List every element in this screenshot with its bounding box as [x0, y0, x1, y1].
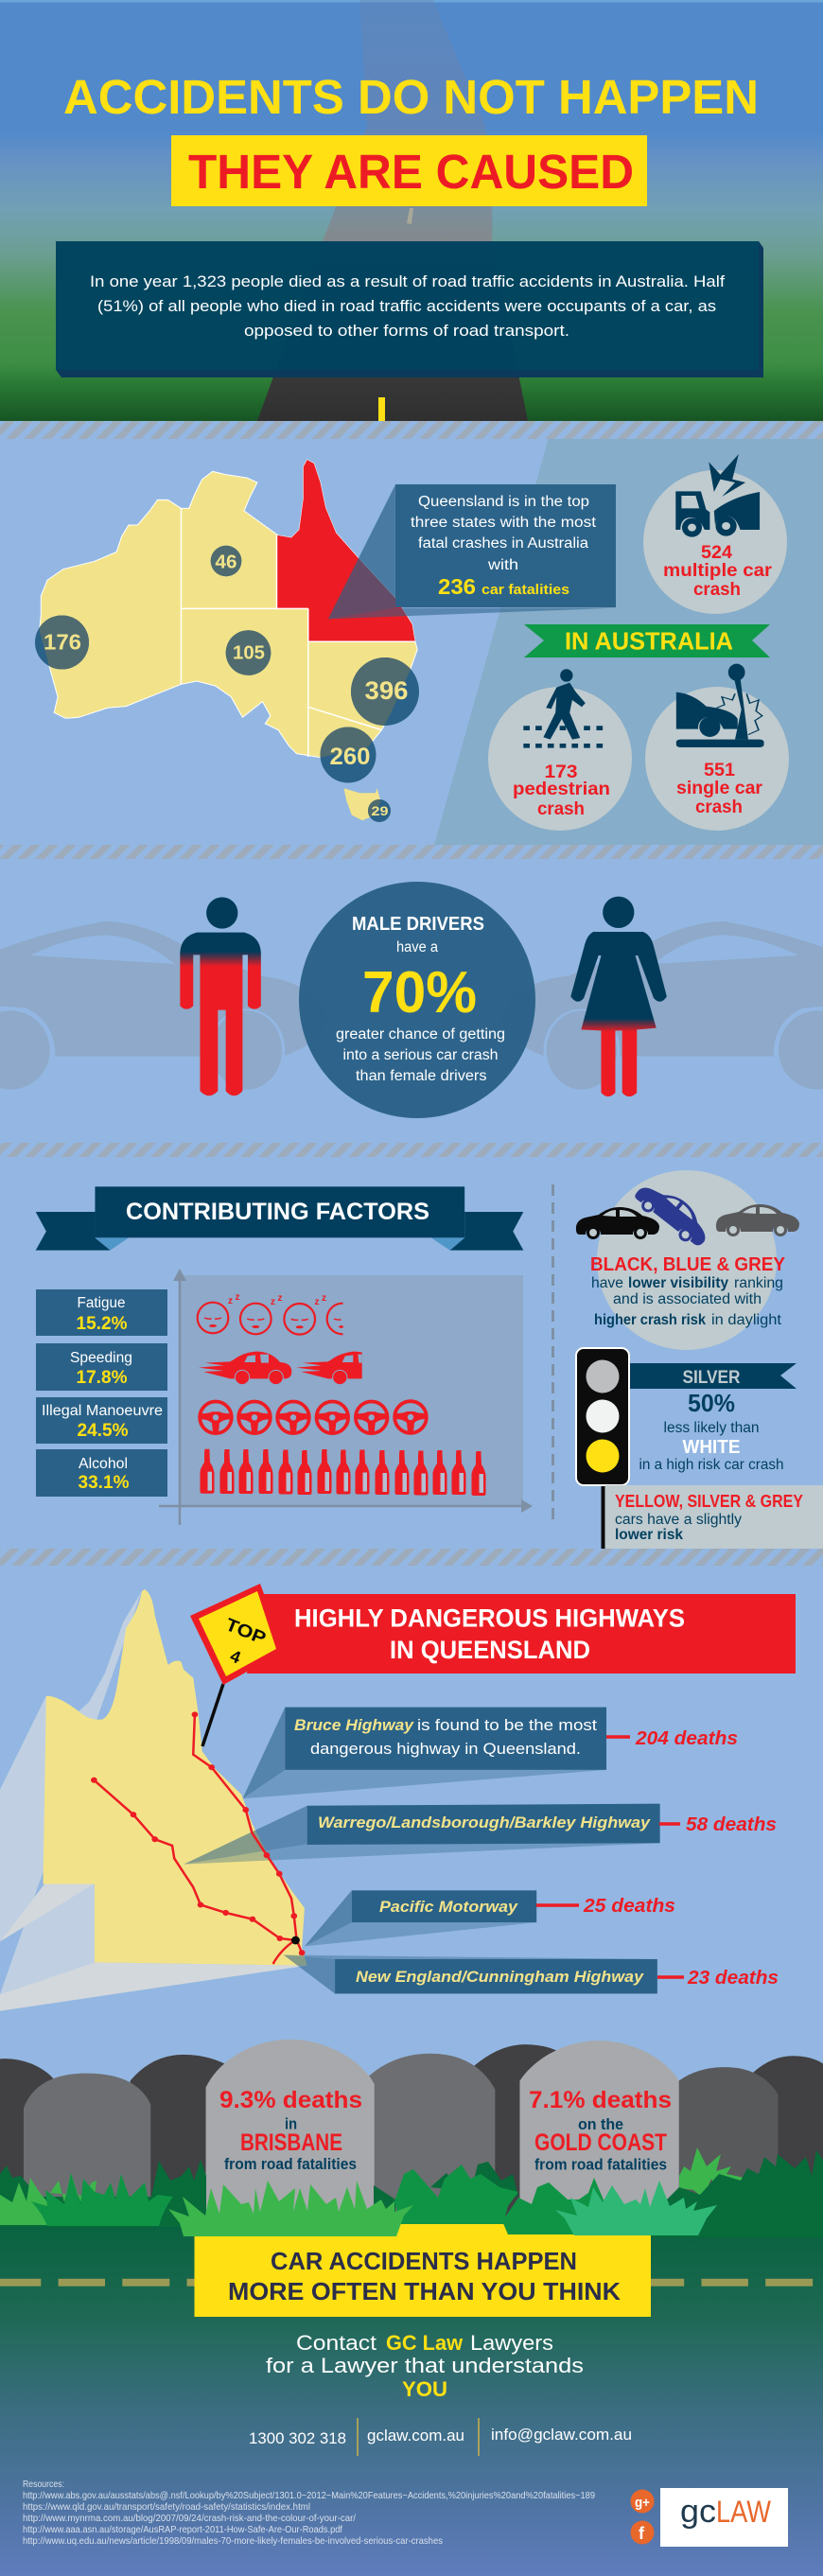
icon: black car — [576, 1207, 659, 1239]
callout: Queensland fatalities: three states with the most — [411, 515, 597, 531]
panel: yellow silver grey note: cars have a slightly — [615, 1512, 742, 1528]
background cars silhouettes — [0, 921, 823, 1091]
intro text panel: (51%) of all people who died in road traffic accidents were occupants of a car, as — [97, 297, 716, 315]
contact details: 1300 302 318 — [249, 2429, 346, 2447]
panel: male drivers statistic: greater chance of getting — [336, 1026, 505, 1043]
callout: New England Cunningham Highway: New England/Cunningham Highway — [356, 1968, 645, 1986]
panel: silver statistic: less likely than — [664, 1420, 759, 1436]
resources list: http://www.uq.edu.au/news/article/1998/09/males-70-more-likely-females-be-involved-serious-car-crashes — [23, 2535, 443, 2547]
panel: yellow silver grey note: YELLOW, SILVER & GREY — [615, 1492, 803, 1511]
stat: multiple car crash: 524 — [701, 543, 732, 563]
tombstone text: Brisbane: in — [285, 2115, 297, 2132]
hatch band divider — [0, 421, 823, 439]
label: illegal manoeuvre: 24.5% — [78, 1421, 129, 1441]
tombstone text: Brisbane: 9.3% deaths — [219, 2087, 362, 2113]
label: fatigue: Fatigue — [78, 1295, 125, 1311]
road and footer background — [0, 2223, 823, 2576]
sleep letters: z — [322, 1293, 326, 1304]
callout: Bruce Highway: dangerous highway in Queensland. — [310, 1740, 581, 1758]
stat: single car crash: crash — [695, 797, 743, 817]
resources list: http://www.mynrma.com.au/blog/2007/09/24/crash-risk-and-the-colour-of-your-car/ — [23, 2513, 356, 2524]
stat: pedestrian crash: pedestrian — [513, 780, 610, 799]
tombstone text: Gold Coast: 7.1% deaths — [529, 2087, 672, 2113]
panel: car colours visibility: have — [591, 1275, 623, 1291]
contact message: for a Lawyer that understands — [266, 2354, 584, 2377]
stat: single car crash — [645, 664, 789, 831]
state figure badges: 46 — [216, 552, 236, 573]
panel: male drivers statistic: than female drivers — [356, 1068, 487, 1084]
icon: car hitting pole — [676, 664, 764, 747]
panel: car colours visibility: ranking — [734, 1275, 783, 1291]
call to action banner: CAR ACCIDENTS HAPPEN — [271, 2247, 577, 2275]
foreground grass clumps — [0, 2164, 717, 2236]
state figure badges: 396 — [365, 676, 409, 705]
label: fatigue — [36, 1289, 167, 1336]
tombstone text: Gold Coast: GOLD COAST — [534, 2129, 667, 2156]
heading banner: dangerous highways: HIGHLY DANGEROUS HIGHWAYS — [294, 1604, 685, 1633]
label: illegal manoeuvre: Illegal Manoeuvre — [42, 1403, 163, 1419]
icon: grey car — [716, 1204, 799, 1236]
stat: single car crash: single car — [676, 779, 763, 798]
logo: GC Law: gc — [680, 2494, 716, 2530]
resources list — [23, 2479, 595, 2547]
icon: facebook — [630, 2520, 655, 2545]
contact message: YOU — [402, 2377, 447, 2401]
icon: google plus — [630, 2490, 655, 2513]
death counts: 23 deaths — [687, 1968, 779, 1989]
stat: pedestrian crash — [488, 669, 632, 831]
panel: car colours visibility: lower visibility — [628, 1275, 728, 1291]
state figure badges: 105 — [233, 643, 265, 664]
tombstone text: Brisbane: from road fatalities — [224, 2155, 357, 2173]
state figure badges — [35, 546, 419, 822]
stat: pedestrian crash: crash — [537, 799, 585, 819]
panel: silver statistic: SILVER — [683, 1368, 741, 1388]
sleep letters: z — [278, 1293, 282, 1304]
panel: male drivers statistic: into a serious car crash — [342, 1047, 498, 1063]
icon: female figure — [570, 897, 667, 1096]
tombstone text: Gold Coast: on the — [578, 2115, 623, 2133]
stat: multiple car crash: crash — [693, 580, 741, 600]
panel: car colours visibility — [576, 1170, 799, 1350]
label: speeding: Speeding — [70, 1350, 132, 1366]
icon: top 4 road sign: TOP — [222, 1615, 269, 1649]
contact details — [249, 2418, 632, 2456]
contact message — [266, 2331, 584, 2401]
resources list: https://www.qld.gov.au/transport/safety/road-safety/statistics/index.html — [23, 2501, 310, 2513]
call to action banner — [195, 2224, 651, 2317]
tombstone text: Gold Coast: from road fatalities — [534, 2155, 667, 2174]
sleep letters: z — [228, 1296, 233, 1306]
death counts: 58 deaths — [686, 1814, 777, 1835]
icon: male figure — [180, 897, 261, 1095]
road dashes — [0, 2279, 813, 2287]
alcohol bottles — [201, 1449, 486, 1496]
right car — [500, 921, 823, 1091]
logo: GC Law: LAW — [716, 2495, 772, 2529]
left car — [0, 921, 328, 1091]
contact message: Lawyers — [470, 2331, 553, 2355]
label: speeding — [36, 1343, 167, 1391]
hatch band divider — [0, 1549, 823, 1566]
banner: in Australia: IN AUSTRALIA — [565, 627, 733, 656]
callout: New England Cunningham Highway — [284, 1955, 657, 1993]
label: alcohol: 33.1% — [78, 1473, 130, 1493]
contact message: GC Law — [386, 2331, 464, 2355]
death counts — [536, 1728, 779, 1989]
resources list: Resources: — [23, 2479, 64, 2490]
state figure badges: 176 — [44, 630, 81, 655]
panel: silver statistic: in a high risk car crash — [639, 1457, 783, 1473]
tombstone text: Brisbane — [219, 2087, 362, 2173]
panel: male drivers statistic: have a — [396, 939, 438, 955]
contact message: Contact — [296, 2331, 376, 2355]
heading ribbon: contributing factors: CONTRIBUTING FACTORS — [126, 1199, 429, 1225]
callout: Warrego Landsborough Barkley Highway: Warrego/Landsborough/Barkley Highway — [318, 1814, 652, 1831]
resources list: http://www.aaa.asn.au/storage/AusRAP-report-2011-How-Safe-Are-Our-Roads.pdf — [23, 2524, 342, 2535]
pictogram chart: contributing factors — [159, 1269, 533, 1525]
heading banner: dangerous highways — [247, 1594, 796, 1674]
call to action banner: MORE OFTEN THAN YOU THINK — [228, 2277, 621, 2305]
subtitle banner: THEY ARE CAUSED — [188, 145, 634, 199]
label: alcohol: Alcohol — [79, 1456, 128, 1472]
label: fatigue: 15.2% — [76, 1314, 128, 1334]
speeding cars — [199, 1351, 362, 1385]
icon: google plus: g+ — [635, 2495, 650, 2511]
sleep letters: z — [271, 1297, 275, 1307]
highway routes — [91, 1711, 305, 1964]
panel: yellow silver grey note: lower risk — [615, 1527, 683, 1543]
contact details: info@gclaw.com.au — [491, 2426, 632, 2444]
panel: car colours visibility: in daylight — [711, 1312, 782, 1328]
panel: yellow silver grey note — [605, 1485, 823, 1551]
callout: Pacific Motorway — [305, 1890, 536, 1946]
callout: Queensland fatalities: Queensland is in the top — [418, 494, 589, 510]
callout: Bruce Highway: is found to be the most — [417, 1716, 597, 1734]
tombstone text: Gold Coast — [529, 2087, 672, 2174]
panel: header scene — [0, 0, 823, 421]
panel: silver statistic: WHITE — [683, 1437, 740, 1458]
death counts: 204 deaths — [635, 1728, 738, 1749]
death counts: 25 deaths — [583, 1896, 675, 1917]
icon: traffic light — [576, 1348, 629, 1551]
sleep letters: z — [314, 1297, 320, 1307]
label: illegal manoeuvre — [36, 1397, 167, 1444]
intro text panel: opposed to other forms of road transport. — [244, 322, 569, 340]
state figure badges: 29 — [371, 803, 389, 818]
panel: right background of Australia section — [434, 421, 823, 845]
stat: multiple car crash: multiple car — [663, 561, 773, 581]
graveyard tombstones — [0, 2040, 823, 2247]
callout: Warrego Landsborough Barkley Highway — [184, 1804, 660, 1865]
panel: car colours visibility: and is associated with — [613, 1291, 762, 1307]
stat: pedestrian crash: 173 — [545, 762, 577, 782]
callout: Queensland fatalities: car fatalities — [482, 583, 569, 598]
icon: pedestrian on crossing — [523, 669, 603, 748]
panel: car colours visibility: higher crash risk — [594, 1312, 706, 1328]
sleep letters: z — [235, 1292, 240, 1303]
heading banner: dangerous highways: IN QUEENSLAND — [390, 1636, 590, 1664]
map: Queensland highways — [0, 1589, 307, 2011]
grass back layer — [0, 2147, 823, 2237]
icon: top 4 road sign — [190, 1584, 285, 1746]
label: speeding: 17.8% — [76, 1368, 128, 1388]
intro text panel — [56, 241, 763, 377]
steering wheels — [200, 1401, 427, 1433]
callout: Queensland fatalities: 236 — [438, 574, 476, 599]
stat: multiple car crash — [643, 454, 787, 614]
banner: in Australia — [524, 624, 770, 657]
fatigue faces — [198, 1303, 358, 1335]
logo: GC Law — [660, 2488, 788, 2547]
map: Australia states — [40, 460, 417, 820]
callout: Pacific Motorway: Pacific Motorway — [379, 1898, 519, 1916]
panel: male drivers statistic — [299, 882, 535, 1118]
panel: male drivers statistic: 70% — [362, 960, 477, 1025]
callout: Bruce Highway: Bruce Highway — [294, 1716, 415, 1734]
title: ACCIDENTS DO NOT HAPPEN — [63, 70, 759, 124]
label: alcohol — [36, 1449, 167, 1497]
callout: Queensland fatalities — [328, 484, 616, 619]
icon: colliding vehicles — [675, 454, 760, 537]
panel: car colours visibility: BLACK, BLUE & GREY — [590, 1254, 786, 1275]
icon: facebook: f — [639, 2524, 645, 2543]
contact details: gclaw.com.au — [367, 2427, 464, 2445]
icon: blue car — [631, 1175, 716, 1252]
tombstone text: Brisbane: BRISBANE — [240, 2129, 342, 2156]
hatch band divider — [0, 1143, 823, 1157]
stat: single car crash: 551 — [704, 761, 735, 780]
intro text panel: In one year 1,323 people died as a result of road traffic accidents in Australia. Half — [90, 272, 725, 290]
panel: male drivers statistic: MALE DRIVERS — [352, 914, 484, 935]
state figure badges: 260 — [329, 744, 371, 770]
callout: Queensland fatalities: fatal crashes in Australia — [418, 535, 588, 552]
heading ribbon: contributing factors — [36, 1186, 523, 1251]
icon: top 4 road sign: 4 — [228, 1646, 243, 1667]
panel: silver statistic — [630, 1363, 797, 1473]
state: Queensland — [276, 460, 416, 641]
resources list: http://www.abs.gov.au/ausstats/abs@.nsf/Lookup/by%20Subject/1301.0~2012~Main%20Features~Accidents,%20injuries%20and%20fatalities~189 — [23, 2490, 595, 2501]
sleep letters — [228, 1292, 326, 1307]
hatch band divider — [0, 845, 823, 859]
callout: Bruce Highway — [242, 1708, 606, 1798]
callout: Queensland fatalities: with — [487, 557, 518, 573]
panel: silver statistic: 50% — [688, 1389, 735, 1417]
